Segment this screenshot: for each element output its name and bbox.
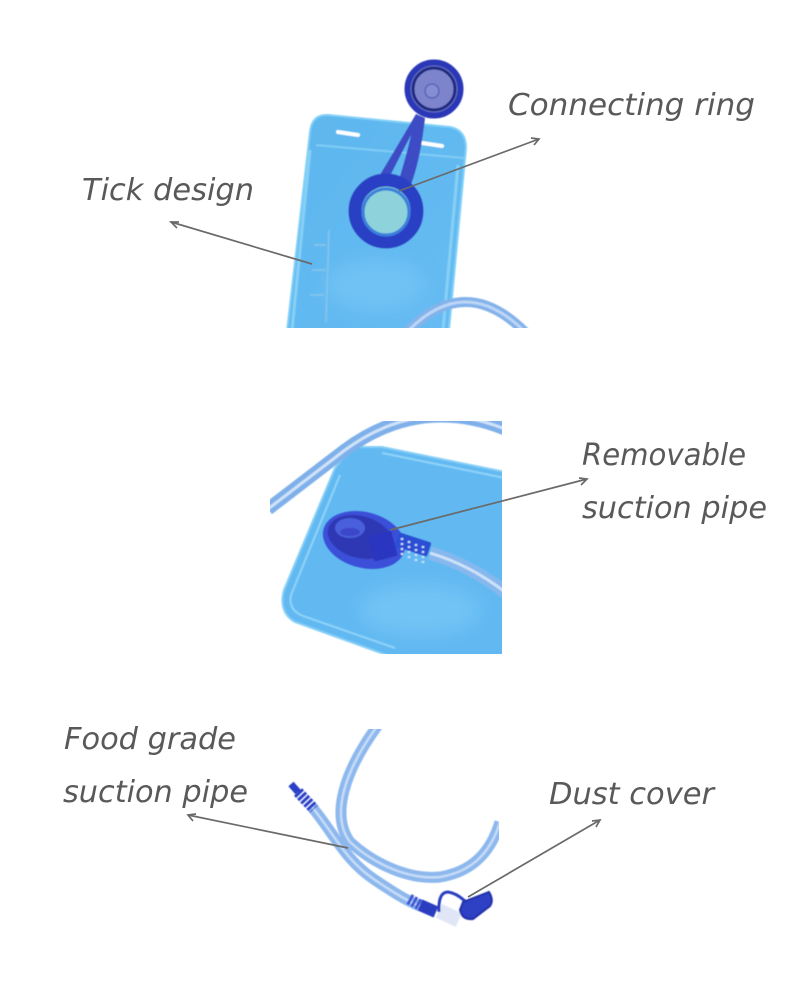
arrow: food grade suction pipe: [188, 814, 348, 848]
label: food grade suction pipe: Food grade: [64, 722, 236, 757]
product photo: suction pipe and dust cover: [291, 725, 500, 927]
upper hose: [268, 416, 505, 509]
end spring connector: [291, 784, 298, 792]
tick marks: [310, 230, 329, 322]
label: dust cover: Dust cover: [549, 777, 716, 812]
label: food grade suction pipe: suction pipe: [63, 775, 248, 810]
bite valve: [409, 899, 420, 905]
label: connecting ring: Connecting ring: [508, 88, 755, 123]
product photo: bladder with connecting ring: [286, 62, 525, 340]
label: removable suction pipe: [582, 438, 767, 526]
cap: [408, 62, 460, 116]
arrow: tick design: [171, 222, 312, 264]
looping hose: [341, 725, 500, 877]
bladder body: [282, 447, 520, 660]
product photo: bladder with removable suction pipe: [270, 421, 502, 654]
label: food grade suction pipe: [63, 722, 248, 810]
bladder body: [286, 115, 466, 340]
lower hose: [430, 553, 505, 592]
soft highlight: [330, 262, 419, 306]
dust cover: [460, 892, 492, 919]
hanging slots: [338, 132, 442, 146]
ring: [355, 180, 417, 242]
arrow: removable suction pipe: [390, 478, 587, 530]
strap: [380, 114, 426, 184]
lower hose: [312, 807, 420, 906]
arrow: dust cover: [468, 820, 600, 897]
label: tick design: Tick design: [82, 173, 254, 208]
nozzle base: [322, 510, 406, 570]
soft highlight: [367, 588, 473, 632]
arrow: connecting ring: [399, 138, 539, 191]
label: removable suction pipe: suction pipe: [582, 491, 767, 526]
connector: [368, 530, 398, 562]
hose loop: [407, 302, 525, 332]
label: removable suction pipe: Removable: [582, 438, 746, 473]
spring: [395, 532, 432, 557]
